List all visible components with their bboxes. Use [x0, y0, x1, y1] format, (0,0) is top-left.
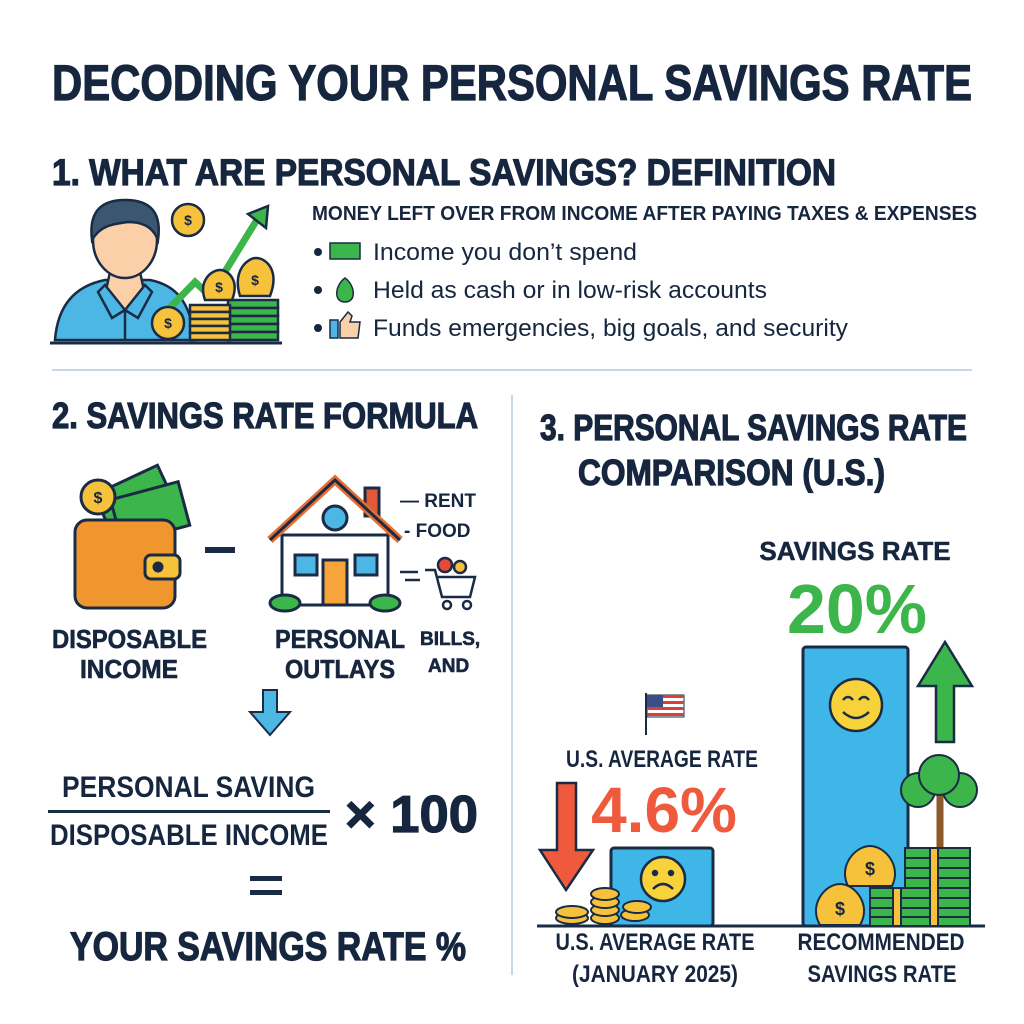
icon: wallet	[75, 465, 190, 608]
text: $	[251, 272, 259, 288]
formula labels: AND	[428, 656, 469, 677]
bullet list: Held as cash or in low-risk accounts	[373, 277, 767, 304]
bullet list: Income you don’t spend	[373, 239, 637, 266]
arrow: down blue	[250, 690, 290, 735]
minus sign	[205, 547, 235, 553]
outlay items: - FOOD	[404, 521, 470, 542]
value label: recommended	[759, 536, 951, 648]
formula labels: PERSONAL	[275, 624, 405, 654]
formula labels: BILLS,	[420, 629, 480, 650]
axis labels	[556, 929, 964, 988]
arrow: red down	[540, 783, 593, 890]
formula fraction: × 100	[345, 786, 478, 844]
formula fraction	[48, 771, 478, 852]
formula labels: OUTLAYS	[285, 654, 395, 684]
equals	[250, 876, 282, 895]
coins	[556, 888, 651, 924]
outlay items: — RENT	[400, 491, 476, 512]
text: $	[215, 279, 223, 295]
formula fraction: PERSONAL SAVING	[62, 771, 315, 804]
text: $	[94, 490, 103, 507]
bar: US average	[611, 848, 713, 926]
bullet list: Funds emergencies, big goals, and security	[373, 315, 848, 342]
heading: section 2: 2. SAVINGS RATE FORMULA	[52, 395, 478, 436]
text: $	[164, 315, 172, 331]
arrow: green up	[918, 642, 972, 742]
definition text: MONEY LEFT OVER FROM INCOME AFTER PAYING TAXES & EXPENSES	[312, 203, 977, 225]
value label: US average: 4.6%	[591, 774, 737, 846]
value label: US average: U.S. AVERAGE RATE	[566, 746, 758, 773]
axis labels: U.S. AVERAGE RATE	[556, 929, 754, 956]
value label: recommended: SAVINGS RATE	[759, 536, 951, 566]
value label: recommended: 20%	[787, 570, 927, 648]
heading: section 3	[540, 407, 967, 493]
bar chart: $	[835, 899, 845, 919]
formula labels: DISPOSABLE	[52, 624, 207, 654]
result text: YOUR SAVINGS RATE %	[70, 925, 466, 969]
icon: flag	[646, 693, 684, 735]
axis labels: SAVINGS RATE	[808, 961, 956, 988]
axis labels: (JANUARY 2025)	[572, 961, 738, 988]
value label: US average	[566, 746, 758, 846]
axis labels: RECOMMENDED	[798, 929, 964, 956]
icon: person with savings growth	[50, 200, 282, 343]
icon: money stacks, bags, tree	[816, 755, 977, 926]
icon: house	[270, 480, 400, 611]
formula labels	[52, 624, 480, 684]
outlay items	[400, 491, 476, 609]
bar chart: $	[865, 859, 875, 879]
formula fraction: DISPOSABLE INCOME	[50, 819, 328, 852]
text: $	[184, 212, 192, 228]
bullet list	[314, 239, 848, 342]
bar chart	[537, 642, 985, 926]
heading: section 1: 1. WHAT ARE PERSONAL SAVINGS? DEFINITION	[52, 152, 836, 193]
bar: recommended	[803, 647, 908, 926]
formula labels: INCOME	[80, 654, 178, 684]
heading: section 3: COMPARISON (U.S.)	[578, 452, 885, 493]
